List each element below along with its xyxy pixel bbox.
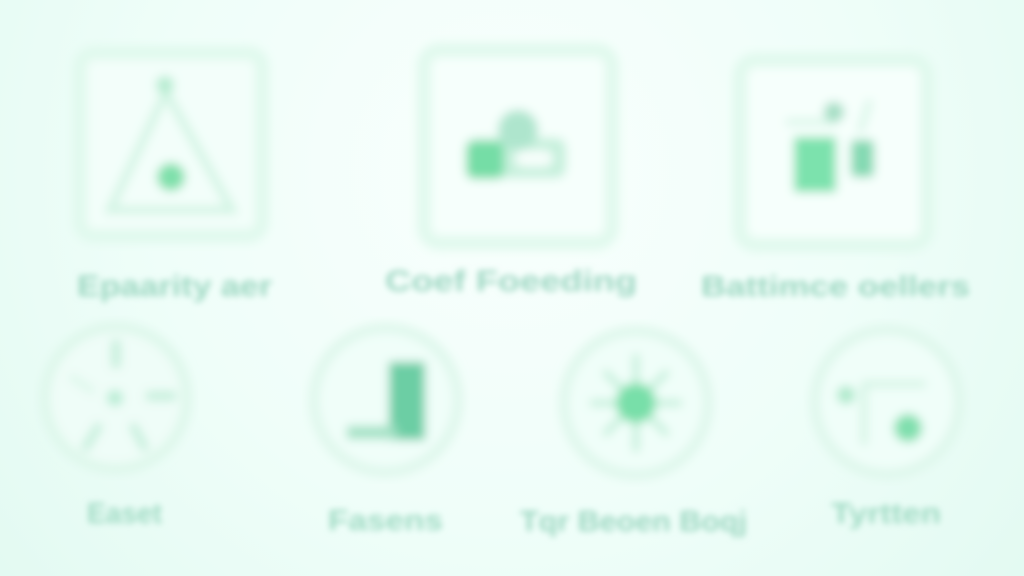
icon: triangle with dots bbox=[110, 76, 232, 210]
panel: triangle icon card bbox=[80, 53, 262, 236]
panel: wheel icon circle bbox=[45, 327, 187, 469]
label: step: Fasens bbox=[328, 505, 443, 537]
panel: circuit icon circle bbox=[815, 330, 959, 474]
icon: circuit bbox=[837, 384, 926, 445]
label: wheel: Easet bbox=[87, 498, 162, 530]
label: second card: Coef Foeeding bbox=[385, 265, 637, 298]
label: circuit: Tyrtten bbox=[831, 498, 941, 530]
label: burst: Tqr Beoen Boqj bbox=[520, 506, 747, 538]
label: first card: Epaarity aer bbox=[77, 270, 272, 303]
panel: cloud icon card bbox=[424, 50, 612, 243]
panel: burst icon circle bbox=[564, 331, 708, 475]
icon: jars bbox=[786, 100, 874, 192]
panel: step icon circle bbox=[314, 328, 458, 472]
icon: L-shaped bar bbox=[347, 362, 425, 440]
label: third card: Battimce oellers bbox=[701, 271, 970, 303]
icon: cloud bbox=[466, 110, 566, 179]
icon: spokes bbox=[70, 340, 176, 450]
panel: jars icon card bbox=[740, 60, 927, 245]
icon: burst bbox=[590, 354, 682, 452]
